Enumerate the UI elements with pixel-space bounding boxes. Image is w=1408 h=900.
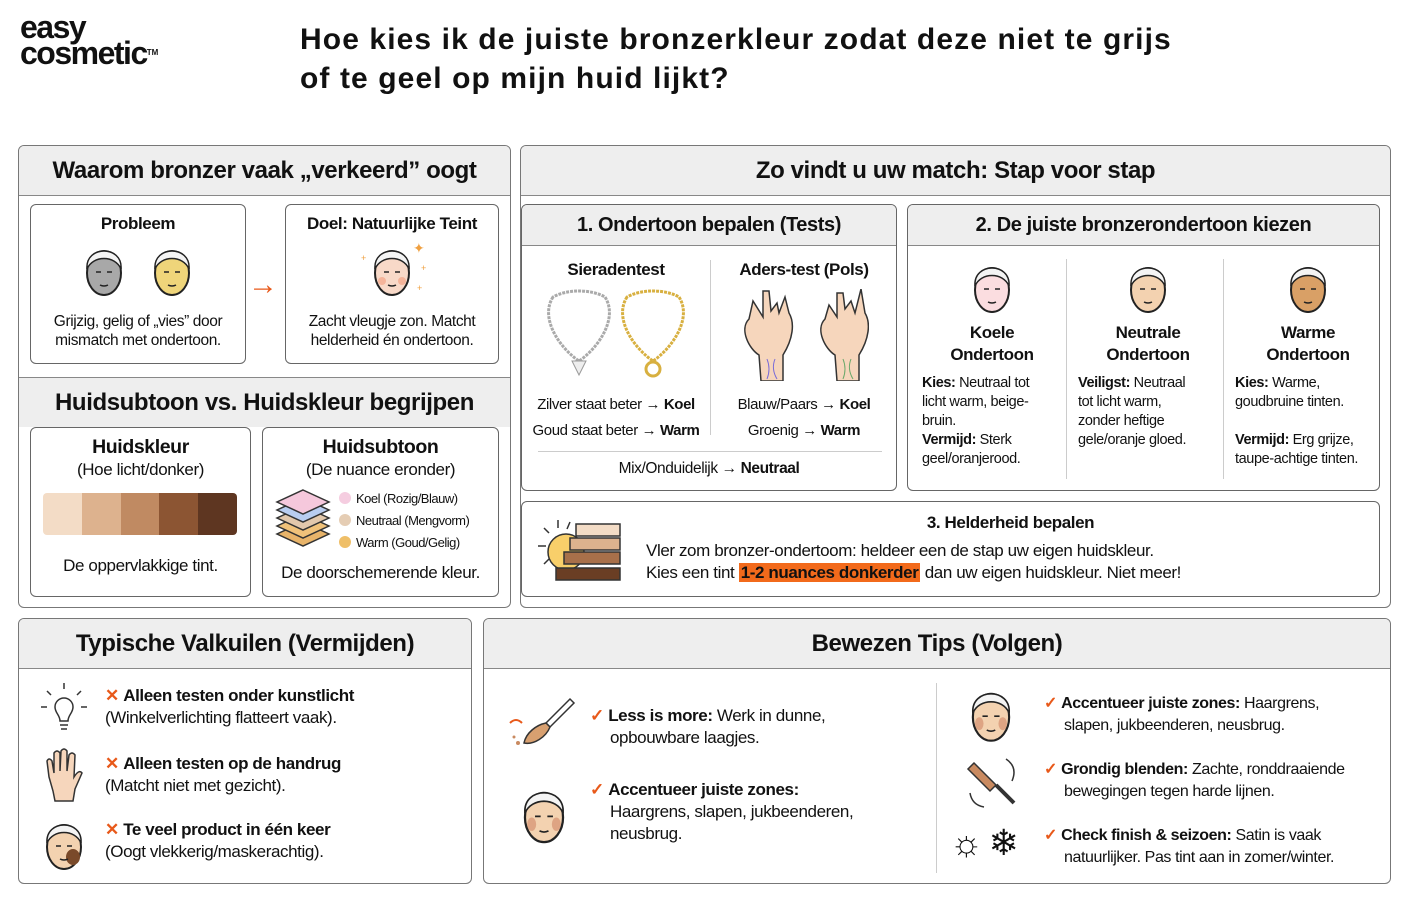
icon: hands [744, 289, 869, 381]
box: huidsubtoon: Huidsubtoon [323, 436, 438, 458]
icon: natural face with sparkles: + [421, 263, 426, 273]
panel: stap voor stap [520, 145, 1391, 608]
logo: cosmeticTM [20, 35, 158, 71]
tip: less is more [509, 698, 825, 747]
column: koele ondertoon: Kies: Neutraal tot [922, 375, 1029, 391]
heading: huidsubtoon vs huidskleur: Huidsubtoon vs. Huidskleur begrijpen [55, 389, 474, 416]
column: warme ondertoon: taupe-achtige tinten. [1235, 451, 1358, 467]
box: probleem: mismatch met ondertoon. [55, 332, 221, 349]
column: koele ondertoon: geel/oranjerood. [922, 451, 1020, 467]
box: huidskleur: (Hoe licht/donker) [77, 460, 204, 479]
panel: waarom bronzer verkeerd oogt [18, 145, 511, 608]
column: neutrale ondertoon: gele/oranje gloed. [1078, 432, 1186, 448]
box: 2 bronzerondertoon kiezen [907, 204, 1380, 491]
tip: finish en seizoen: ☼❄ [950, 822, 1018, 863]
icon: layers [275, 489, 331, 547]
icon: natural face with sparkles: + [417, 283, 422, 293]
box: huidsubtoon [262, 427, 499, 597]
column: neutrale ondertoon: Veiligst: Neutraal [1078, 375, 1185, 391]
icon: necklaces [547, 290, 685, 378]
box: probleem [30, 204, 246, 364]
item: te veel product: (Oogt vlekkerig/maskerachtig). [105, 842, 324, 861]
legend: undertones [339, 491, 469, 550]
box: probleem: Grijzig, gelig of „vies” door [54, 313, 222, 330]
tip: less is more: opbouwbare laagjes. [610, 728, 759, 747]
column: koele ondertoon: bruin. [922, 413, 956, 429]
column: neutrale ondertoon [1078, 267, 1190, 448]
box: doel: Zacht vleugje zon. Matcht [309, 313, 475, 330]
column: koele ondertoon: licht warm, beige- [922, 394, 1028, 410]
logo [20, 9, 158, 71]
heading: stap voor stap [521, 146, 1390, 196]
title [300, 23, 1172, 95]
sieradentest: Goud staat beter → Warm [532, 422, 700, 439]
panel: bewezen tips [483, 618, 1391, 884]
column: warme ondertoon: Warme [1281, 323, 1335, 342]
column: warme ondertoon: goudbruine tinten. [1235, 394, 1344, 410]
column: koele ondertoon: Ondertoon [950, 345, 1034, 364]
box: 3 helderheid bepalen: Vler zom bronzer-ondertoom: heldeer een de stap uw eigen huidskleur. [646, 541, 1154, 560]
heading: tips [484, 619, 1390, 669]
heading: stap voor stap: Zo vindt u uw match: Stap voor stap [756, 157, 1155, 184]
item: handrug [46, 748, 341, 802]
sieradentest: Zilver staat beter → Koel [537, 396, 695, 413]
column: neutrale ondertoon: zonder heftige [1078, 413, 1164, 429]
panel: typische valkuilen [18, 618, 472, 884]
icon: sun with tone stairs [538, 520, 621, 581]
column: koele ondertoon: Koele [970, 323, 1014, 342]
tip: finish en seizoen: natuurlijker. Pas tint aan in zomer/winter. [1064, 849, 1334, 866]
box: huidskleur: De oppervlakkige tint. [63, 556, 218, 575]
column: neutrale ondertoon: Ondertoon [1106, 345, 1190, 364]
tip: less is more: ✓ Less is more: Werk in dunne, [590, 706, 825, 725]
legend: undertones: Koel (Rozig/Blauw) [356, 491, 458, 506]
heading: valkuilen: Typische Valkuilen (Vermijden) [76, 630, 414, 657]
legend: undertones: Neutraal (Mengvorm) [356, 513, 469, 528]
tip: accentueer zones right: slapen, jukbeenderen, neusbrug. [1064, 717, 1285, 734]
icon: grey and yellow faces [86, 250, 190, 296]
tip: grondig blenden [967, 758, 1345, 808]
column: warme ondertoon: Vermijd: Erg grijze, [1235, 432, 1354, 448]
item: kunstlicht [41, 683, 354, 730]
box: 2 bronzerondertoon kiezen: 2. De juiste bronzerondertoon kiezen [976, 214, 1311, 236]
box: doel: helderheid én ondertoon. [311, 332, 473, 349]
tip: accentueer zones left: ✓ Accentueer juiste zones: [590, 780, 799, 799]
box: 1 ondertoon bepalen: 1. Ondertoon bepalen (Tests) [577, 214, 841, 236]
column: warme ondertoon: Ondertoon [1266, 345, 1350, 364]
tip: accentueer zones left [524, 780, 853, 844]
box: 3 helderheid bepalen [521, 501, 1380, 597]
sieradentest [532, 260, 700, 439]
tip: accentueer zones left: neusbrug. [610, 824, 682, 843]
heading: waarom [19, 146, 510, 196]
box: huidskleur: Huidskleur [92, 436, 189, 458]
icon: natural face with sparkles: + [361, 253, 366, 263]
tip: grondig blenden: ✓ Grondig blenden: Zachte, ronddraaiende [1044, 761, 1345, 778]
column: koele ondertoon: Vermijd: Sterk [922, 432, 1012, 448]
heading: valkuilen [19, 619, 471, 669]
box: probleem: Probleem [101, 214, 175, 233]
box: huidskleur [30, 427, 251, 597]
item: te veel product: ✕ Te veel product in één keer [105, 820, 330, 839]
icon: natural face with sparkles: ✦ [413, 240, 425, 256]
tip: finish en seizoen [950, 822, 1334, 866]
heading: huidsubtoon vs huidskleur [19, 377, 510, 427]
heading: tips: Bewezen Tips (Volgen) [812, 630, 1062, 657]
swatch: skin tones [43, 493, 237, 535]
column: warme ondertoon [1235, 267, 1358, 467]
box: doel [285, 204, 499, 364]
box: 1 ondertoon bepalen [521, 204, 897, 491]
legend: undertones: Warm (Goud/Gelig) [356, 535, 460, 550]
column: neutrale ondertoon: Neutrale [1116, 323, 1180, 342]
tip: accentueer zones right [972, 692, 1319, 742]
aders-test: Groenig → Warm [748, 422, 860, 439]
tip: accentueer zones left: Haargrens, slapen, jukbeenderen, [610, 802, 853, 821]
logo: easy [20, 9, 85, 45]
box: 3 helderheid bepalen: Kies een tint 1-2 nuances donkerder dan uw eigen huidskleur. Niet meer! [646, 563, 1181, 582]
aders-test: Blauw/Paars → Koel [738, 396, 870, 413]
item: handrug: (Matcht niet met gezicht). [105, 776, 285, 795]
aders-test [738, 260, 870, 439]
icon: natural face with sparkles [361, 240, 426, 296]
title: Hoe kies ik de juiste bronzerkleur zodat deze niet te grijs [300, 23, 1172, 56]
item: te veel product [46, 820, 330, 870]
heading: waarom: Waarom bronzer vaak „verkeerd” oogt [53, 157, 476, 184]
aders-test: Aders-test (Pols) [739, 260, 869, 279]
box: 1 ondertoon bepalen: Mix/Onduidelijk → Neutraal [619, 460, 799, 477]
column: warme ondertoon: Kies: Warme, [1235, 375, 1320, 391]
tip: finish en seizoen: ✓ Check finish & seizoen: Satin is vaak [1044, 827, 1321, 844]
title: of te geel op mijn huid lijkt? [300, 62, 730, 95]
box: huidsubtoon: De doorschemerende kleur. [281, 563, 480, 582]
item: kunstlicht: ✕ Alleen testen onder kunstlicht [105, 686, 354, 705]
item: handrug: ✕ Alleen testen op de handrug [105, 754, 341, 773]
box: doel: Doel: Natuurlijke Teint [307, 214, 477, 233]
item: kunstlicht: (Winkelverlichting flatteert vaak). [105, 708, 337, 727]
tip: accentueer zones right: ✓ Accentueer juiste zones: Haargrens, [1044, 695, 1319, 712]
box: 3 helderheid bepalen: 3. Helderheid bepalen [927, 513, 1094, 532]
column: koele ondertoon [922, 267, 1034, 467]
box: huidsubtoon: (De nuance eronder) [306, 460, 455, 479]
arrow: → [248, 268, 278, 301]
column: neutrale ondertoon: tot licht warm, [1078, 394, 1161, 410]
tip: grondig blenden: bewegingen tegen harde lijnen. [1064, 783, 1274, 800]
sieradentest: Sieradentest [567, 260, 665, 279]
